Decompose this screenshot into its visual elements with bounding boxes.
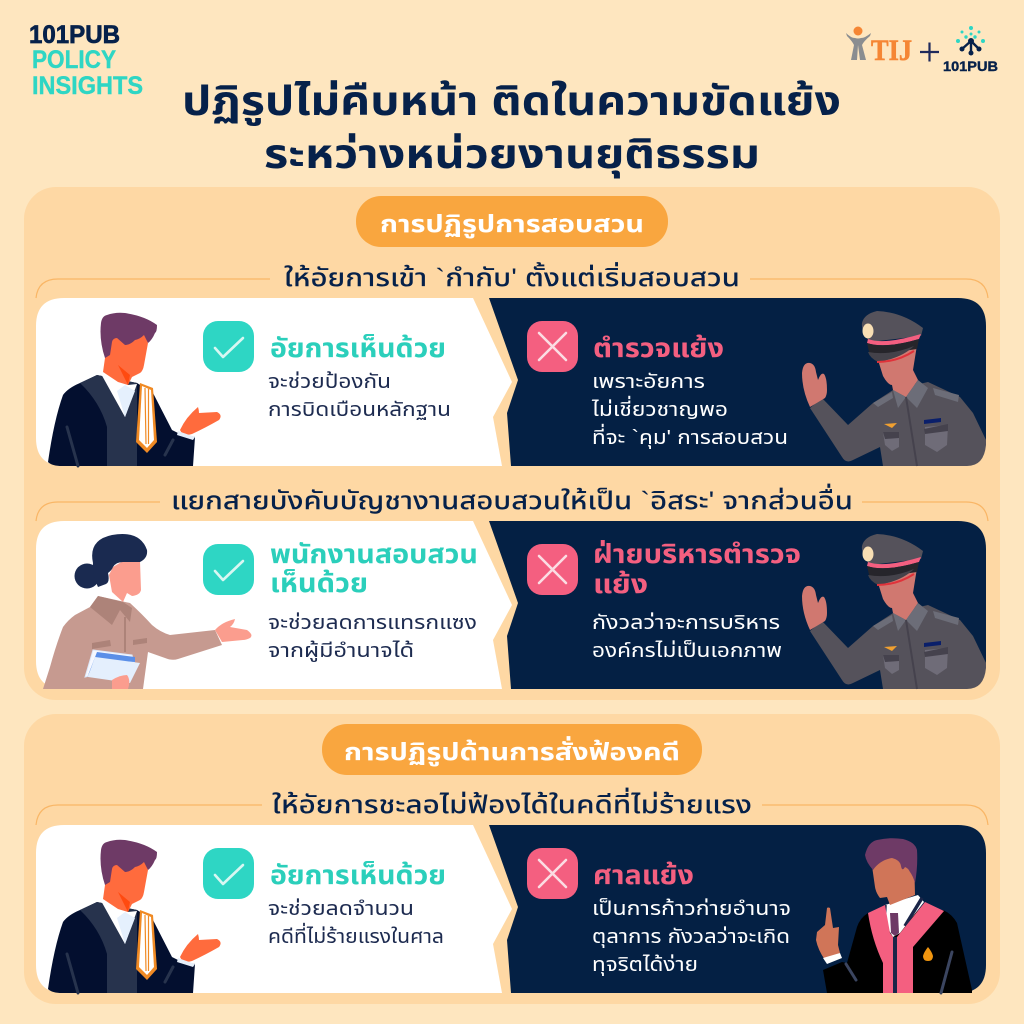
text: investigators agree <box>268 539 478 663</box>
logo: 101PUB Policy Insights: 101PUB <box>29 21 120 49</box>
heading pill: prosecution reform <box>322 724 702 775</box>
icon: cross mark <box>527 544 578 595</box>
text: investigators agree: เห็นด้วย <box>270 568 368 598</box>
text: police administration objects <box>592 539 801 662</box>
text: courts object <box>592 860 791 976</box>
heading pill: prosecution reform: การปฏิรูปด้านการสั่งฟ้องคดี <box>344 736 680 767</box>
text: prosecutors agree: การบิดเบือนหลักฐาน <box>268 399 451 421</box>
text: courts object: เป็นการก้าวก่ายอำนาจ <box>592 897 791 920</box>
text: investigators agree: จะช่วยลดการแทรกแซง <box>268 611 477 634</box>
text: police administration objects: องค์กรไม่เป็นเอกภาพ <box>592 639 782 662</box>
text: prosecutors agree: จะช่วยป้องกัน <box>268 370 391 393</box>
card: prosecutors agree <box>36 825 512 993</box>
text: police administration objects: กังวลว่าจะการบริหาร <box>592 611 780 634</box>
card: courts object <box>489 825 986 993</box>
panel: prosecution reform <box>24 714 1000 1004</box>
icon: check mark <box>203 848 254 899</box>
title <box>182 78 841 179</box>
icon: cross mark <box>527 848 578 899</box>
text: prosecutors agree: จะช่วยลดจำนวน <box>268 897 414 920</box>
text: police object: ตำรวจแย้ง <box>593 333 724 363</box>
logo: 101PUB Policy Insights: INSIGHTS <box>32 72 143 100</box>
panel: investigation reform <box>24 187 1000 700</box>
subheading: prosecutors supervise investigations: ให้อัยการเข้า `กำกับ' ตั้งแต่เริ่มสอบสวน <box>284 261 740 292</box>
card: police administration objects <box>489 521 986 689</box>
icon: cross mark <box>527 321 578 372</box>
text: prosecutors agree <box>268 860 446 948</box>
heading pill: investigation reform: การปฏิรูปการสอบสวน <box>380 211 644 239</box>
subheading: suspended prosecution: ให้อัยการชะลอไม่ฟ้องได้ในคดีที่ไม่ร้ายแรง <box>272 787 752 819</box>
figure: prosecutor <box>48 313 221 466</box>
figure: female investigator <box>43 534 251 689</box>
text: police administration objects: แย้ง <box>593 569 648 599</box>
text: prosecutors agree <box>268 333 451 421</box>
text: courts object: ทุจริตได้ง่าย <box>592 953 698 976</box>
card: investigators agree <box>36 521 512 689</box>
text: prosecutors agree: อัยการเห็นด้วย <box>270 333 446 363</box>
text: investigators agree: จากผู้มีอำนาจได้ <box>268 639 414 663</box>
text: police administration objects: ฝ่ายบริหารตำรวจ <box>593 539 801 569</box>
logo: 101PUB Policy Insights <box>29 21 143 100</box>
title: ปฏิรูปไม่คืบหน้า ติดในความขัดแย้ง <box>182 78 841 126</box>
title: ระหว่างหน่วยงานยุติธรรม <box>264 131 760 179</box>
icon: check mark <box>203 544 254 595</box>
heading pill: investigation reform <box>356 196 668 247</box>
text: police object: ไม่เชี่ยวชาญพอ <box>591 395 728 421</box>
subheading: independent chain of command: แยกสายบังคับบัญชางานสอบสวนให้เป็น `อิสระ' จากส่วนอื่น <box>171 483 853 515</box>
logo: TIJ and 101PUB partner marks <box>846 26 998 74</box>
logo: 101PUB Policy Insights: POLICY <box>32 46 116 74</box>
text: police object: เพราะอัยการ <box>592 371 705 393</box>
text: police object: ที่จะ `คุม' การสอบสวน <box>592 423 788 449</box>
text: courts object: ตุลาการ กังวลว่าจะเกิด <box>592 925 790 948</box>
text: prosecutors agree: คดีที่ไม่ร้ายแรงในศาล <box>268 922 444 948</box>
icon: check mark <box>203 321 254 372</box>
card: prosecutors agree <box>36 298 512 466</box>
text: investigators agree: พนักงานสอบสวน <box>270 539 478 569</box>
logo: TIJ and 101PUB partner marks: 101PUB <box>943 58 998 74</box>
figure: judge <box>816 838 972 993</box>
figure: police officer <box>802 311 986 466</box>
text: prosecutors agree: อัยการเห็นด้วย <box>270 860 446 890</box>
text: courts object: ศาลแย้ง <box>593 860 694 890</box>
figure: police officer <box>802 534 986 689</box>
card: police object <box>489 298 986 466</box>
figure: prosecutor <box>48 840 221 993</box>
text: police object <box>591 333 788 449</box>
logo: TIJ and 101PUB partner marks: TIJ <box>871 34 912 67</box>
